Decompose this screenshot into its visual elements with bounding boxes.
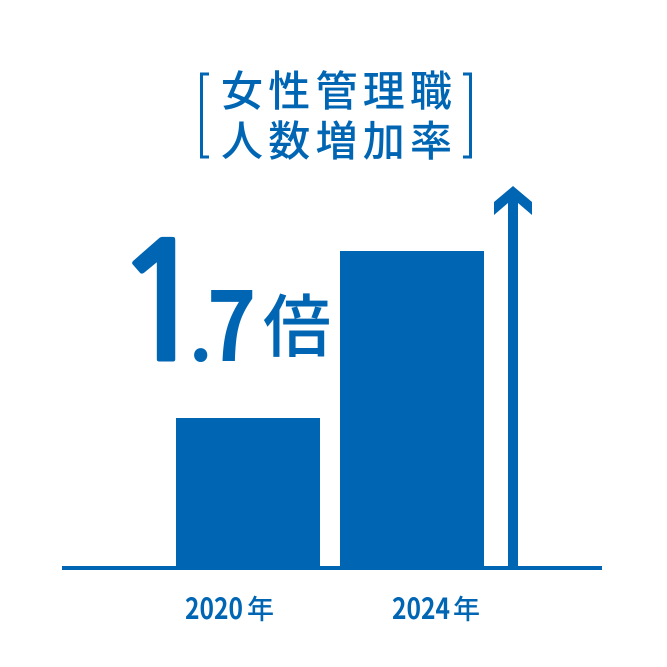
- digit 7: 7: [207, 250, 256, 389]
- arrow: upward growth: [494, 186, 532, 568]
- label: 2020: 年: [247, 588, 274, 627]
- right bracket: [463, 74, 470, 157]
- title line 2: 人数増加率: [221, 108, 452, 169]
- big figure: 1.7 times: [110, 224, 331, 389]
- baseline axis: [62, 566, 602, 570]
- title line 1: 女性管理職: [221, 58, 452, 119]
- decimal point: .: [189, 277, 212, 382]
- label: 2024: 2024: [392, 586, 450, 628]
- bar chart: [62, 251, 602, 570]
- bar: 2020: [176, 418, 320, 568]
- title: bracketed heading: [202, 58, 470, 169]
- bar: 2024: [340, 251, 484, 568]
- label: 2020: 2020: [185, 586, 243, 628]
- label: 2024: 年: [453, 588, 480, 627]
- unit: times: 倍: [263, 272, 331, 371]
- digit 1: 1: [110, 224, 214, 386]
- left bracket: [202, 74, 209, 157]
